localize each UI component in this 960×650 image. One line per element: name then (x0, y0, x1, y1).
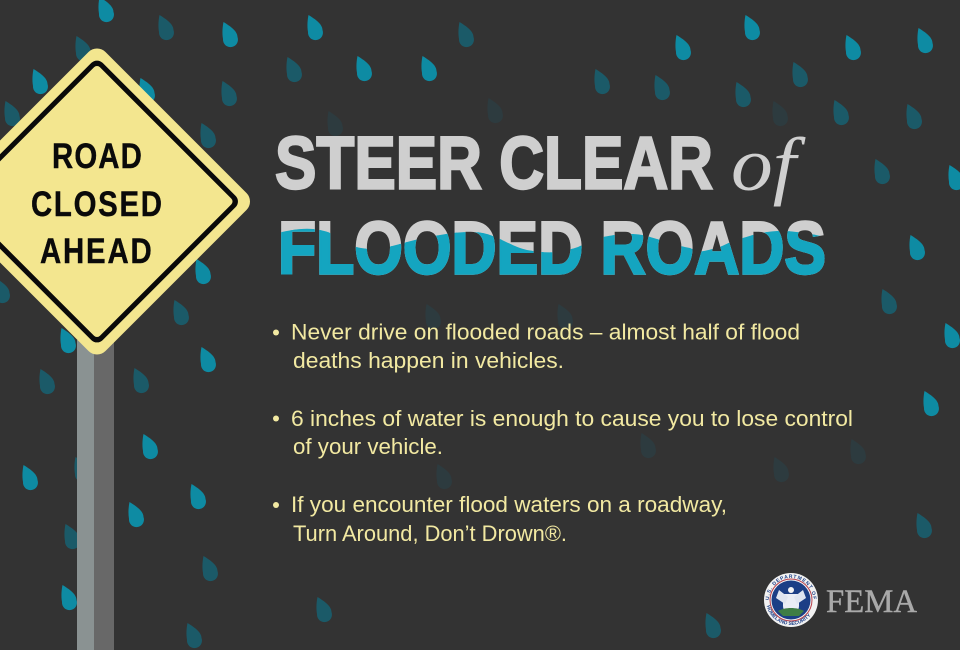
DHS seal: HOMELAND SECURITY (766, 605, 810, 625)
sign post (77, 340, 114, 650)
bullet 2 (273, 406, 853, 459)
title: flooded roads (281, 220, 825, 276)
sign text: CLOSED (31, 185, 162, 224)
rain drops: faint (327, 98, 866, 489)
bullet list (273, 320, 853, 546)
title: flooded roads: FLOODED ROADS (278, 206, 826, 290)
FEMA wordmark: FEMA (826, 584, 917, 620)
DHS seal (764, 573, 818, 627)
bullet 1: Never drive on flooded roads – almost half of flood (291, 320, 800, 344)
road sign (0, 44, 255, 359)
bullet 2: 6 inches of water is enough to cause you to lose control (291, 406, 853, 431)
title: flooded roads: FLOODED ROADS (278, 206, 826, 290)
bullet 1: deaths happen in vehicles. (293, 348, 564, 373)
title: steer clear of: of (731, 123, 806, 207)
bullet 2: of your vehicle. (293, 434, 443, 459)
bullet 3: If you encounter flood waters on a roadway, (291, 492, 727, 517)
bullet 1 (273, 320, 800, 373)
sign text: AHEAD (40, 232, 152, 271)
bullet 3 (273, 492, 727, 546)
bullet 3: Turn Around, Don’t Drown®. (293, 521, 567, 546)
title: steer clear of: STEER CLEAR (275, 122, 713, 204)
sign text: ROAD (52, 137, 142, 176)
DHS seal: U.S. DEPARTMENT OF (766, 574, 816, 600)
sign text (31, 137, 162, 271)
